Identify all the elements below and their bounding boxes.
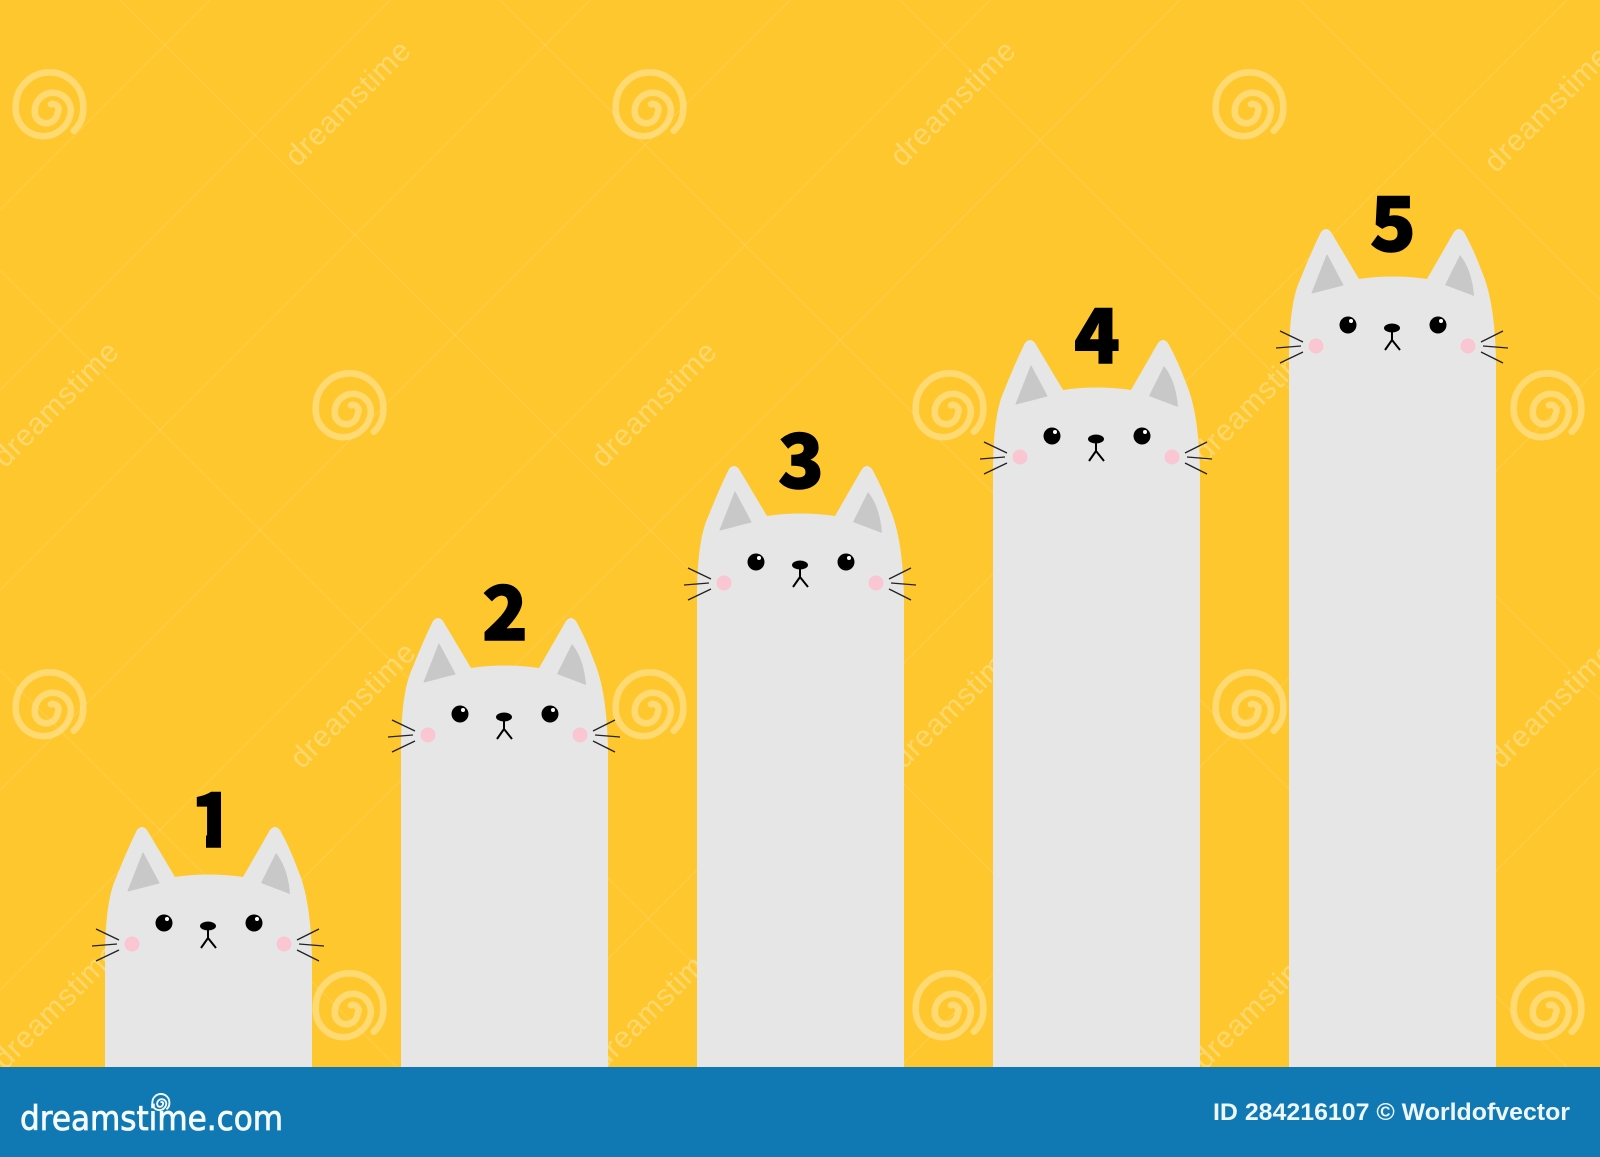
watermark pattern: dreamstime xyxy=(585,335,724,474)
bar 5: cat xyxy=(1276,229,1508,1067)
bar 4: cat xyxy=(980,340,1212,1067)
watermark pattern: dreamstime xyxy=(279,34,418,173)
footer band xyxy=(0,1067,1600,1157)
watermark pattern: dreamstime xyxy=(1187,330,1326,469)
bar 1: cat xyxy=(92,827,324,1067)
watermark pattern: dreamstime xyxy=(284,636,423,775)
watermark pattern: dreamstime xyxy=(884,34,1023,173)
number 3: 3 xyxy=(778,401,824,510)
image id and credit: ID 284216107 © Worldofvector xyxy=(1213,1099,1570,1126)
watermark pattern: dreamstime xyxy=(585,937,724,1076)
logo: dreamstime.com: dreamstime.com xyxy=(20,1099,283,1139)
watermark pattern: dreamstime xyxy=(1187,937,1326,1076)
bar 3: cat xyxy=(684,466,916,1067)
number 1: 1 xyxy=(190,760,236,869)
number 2: 2 xyxy=(482,553,528,662)
watermark pattern: dreamstime xyxy=(886,636,1025,775)
number 4: 4 xyxy=(1074,276,1120,385)
number 5: 5 xyxy=(1370,164,1416,273)
bar 2: cat xyxy=(388,618,620,1067)
